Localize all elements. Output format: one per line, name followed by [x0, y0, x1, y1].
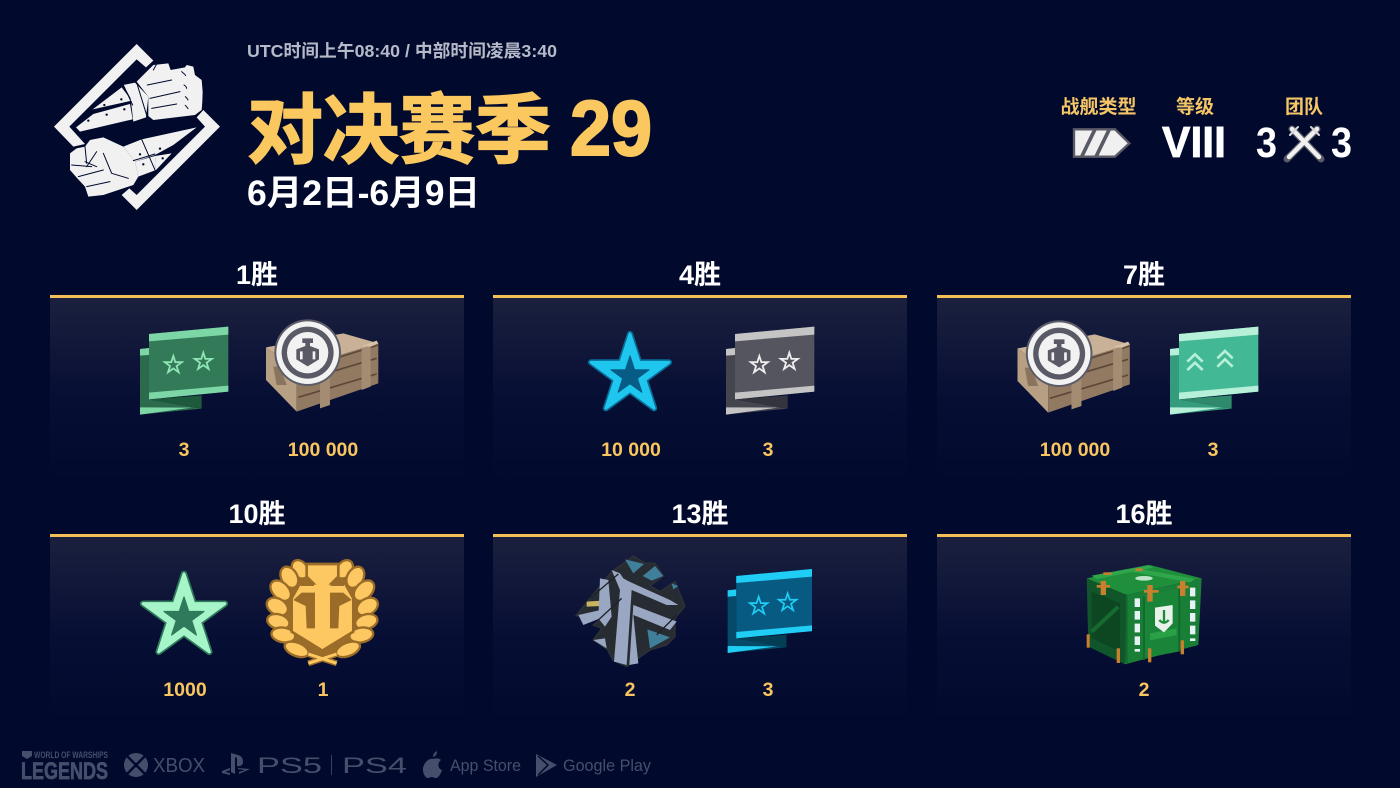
panel: 4 wins [493, 260, 907, 482]
logo: World of Warships Legends [21, 750, 108, 785]
tier info [1162, 95, 1226, 167]
team info [1256, 96, 1352, 167]
value: flags: 3 [763, 679, 774, 701]
dates: 6月2日-6月9日 [247, 174, 480, 213]
logo: PS5 and PS4: PS4 [342, 753, 407, 778]
logo: PS5 and PS4: PS5 [257, 753, 322, 778]
icon: crossed swords [1287, 127, 1321, 159]
logo: Xbox: XBOX [153, 755, 205, 777]
panel: 16 wins [937, 499, 1351, 721]
logo: App Store [423, 751, 521, 778]
logo: PS5 and PS4 [222, 753, 407, 778]
team size right: 3 [1331, 119, 1352, 167]
icon: destroyer class [1074, 129, 1129, 157]
value: credits: 100 000 [1040, 439, 1110, 461]
team size left: 3 [1256, 119, 1277, 167]
logo: Xbox [124, 753, 205, 777]
icon: grey flag [726, 327, 814, 415]
label: team: 团队 [1285, 96, 1323, 118]
icon: green flag [140, 327, 228, 415]
icon: gold laurel medal [264, 557, 381, 663]
logo: World of Warships Legends: WORLD OF WARSHIPS [34, 750, 108, 760]
logo: App Store: App Store [450, 756, 521, 775]
time line: UTC时间上午08:40 / 中部时间凌晨3:40 [247, 40, 557, 61]
value: credits: 100 000 [288, 439, 358, 461]
value: flags: 3 [1208, 439, 1219, 461]
icon: credits crate [1017, 320, 1130, 413]
icon: teal flag [1170, 327, 1258, 415]
value: flags: 3 [763, 439, 774, 461]
logo: Google Play: Google Play [563, 756, 651, 775]
value: coal: 10 000 [601, 439, 661, 461]
season number: 29 [570, 84, 652, 172]
panel: 7 wins [937, 260, 1351, 482]
panel: 1 win [50, 260, 464, 482]
label: tier: 等级 [1176, 95, 1214, 118]
footer: platform logos [21, 750, 651, 785]
value: coal: 1000 [163, 679, 207, 701]
icon: green star [143, 574, 225, 652]
heading: 13 wins: 13胜 [671, 499, 729, 529]
icon: green container [1087, 565, 1202, 664]
heading: 7 wins: 7胜 [1123, 260, 1165, 290]
logo: armored fists in a diamond [54, 44, 220, 210]
heading: 4 wins: 4胜 [679, 260, 721, 290]
icon: credits crate [266, 319, 378, 412]
icon: camouflage emblem [576, 556, 685, 667]
heading: 16 wins: 16胜 [1115, 499, 1173, 529]
label: ship type: 战舰类型 [1060, 96, 1137, 118]
logo: World of Warships Legends: LEGENDS [21, 758, 108, 785]
value: camouflage: 2 [625, 679, 636, 701]
ship type info [1060, 96, 1137, 157]
panel: 10 wins [50, 499, 464, 721]
main title: 对决赛季 [247, 89, 551, 174]
icon: blue flag [728, 569, 812, 653]
logo: Google Play [536, 754, 651, 777]
panel: 13 wins [493, 499, 907, 721]
value: containers: 2 [1139, 679, 1150, 701]
value: medal: 1 [318, 679, 329, 701]
heading: 10 wins: 10胜 [228, 499, 286, 529]
value: flags: 3 [179, 439, 190, 461]
icon: blue star [591, 334, 669, 408]
header text block [247, 40, 652, 213]
heading: 1 win: 1胜 [236, 260, 278, 290]
tier value: VIII [1162, 118, 1226, 167]
